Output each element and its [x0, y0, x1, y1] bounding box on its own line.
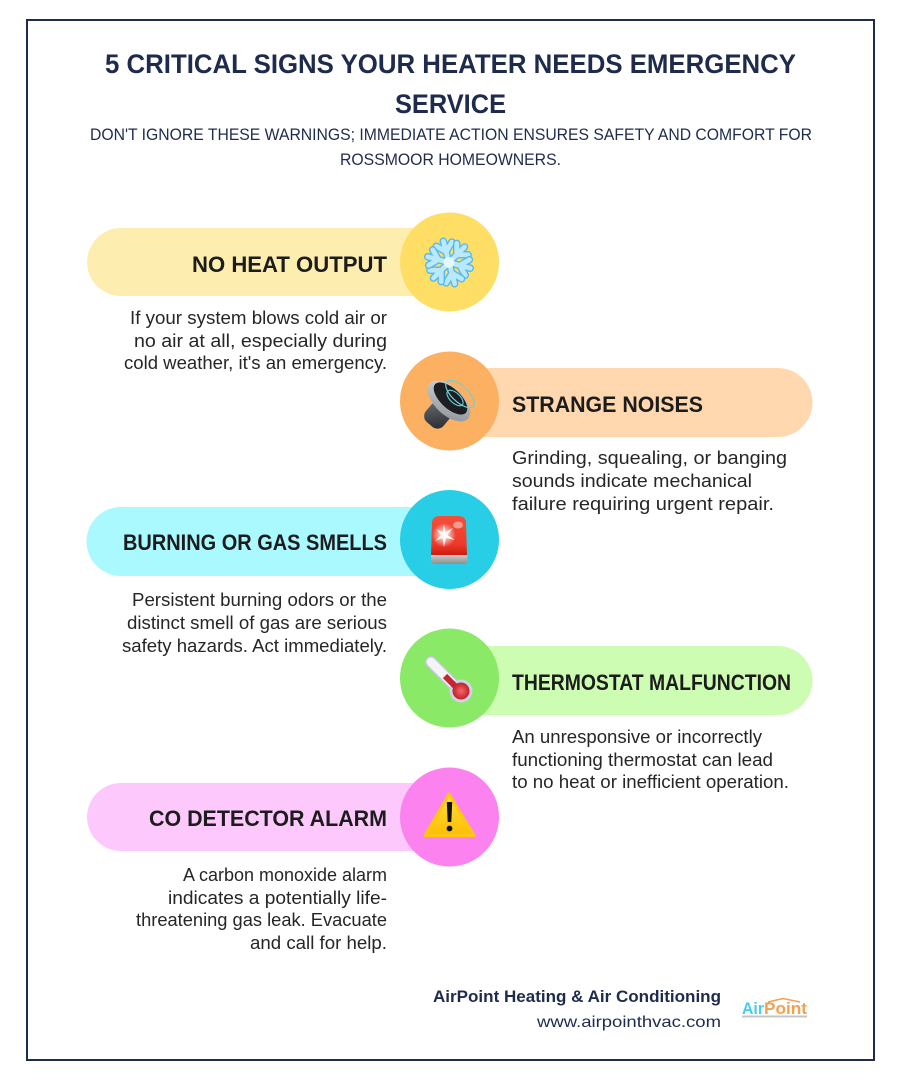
logo: AirPoint: Point: [764, 999, 807, 1018]
logo: AirPoint: Air: [742, 999, 764, 1018]
pill: co detector alarm: [87, 783, 440, 851]
text: burning or gas smells: [122, 590, 387, 656]
text: thermostat malfunction: An unresponsive or incorrectly: [512, 727, 762, 747]
footer company name: AirPoint Heating & Air Conditioning: [433, 988, 721, 1006]
text: co detector alarm: threatening gas leak. Evacuate: [136, 910, 387, 930]
circle: co detector alarm: [400, 768, 499, 866]
heading: no heat output: NO HEAT OUTPUT: [192, 252, 388, 277]
heading: burning or gas smells: BURNING OR GAS SMELLS: [123, 530, 387, 555]
icon: thermometer: [431, 662, 472, 702]
title: SERVICE: [395, 89, 506, 119]
text: co detector alarm: A carbon monoxide alarm: [183, 865, 387, 885]
text: no heat output: [124, 308, 387, 373]
text: strange noises: failure requiring urgent repair.: [512, 494, 774, 514]
pill: thermostat malfunction: [460, 646, 813, 715]
text: no heat output: If your system blows cold air or: [130, 308, 387, 328]
text: no heat output: cold weather, it's an emergency.: [124, 353, 387, 373]
text: co detector alarm: and call for help.: [250, 933, 387, 953]
panel: strange noises: [400, 352, 813, 514]
heading: co detector alarm: CO DETECTOR ALARM: [149, 806, 387, 831]
text: burning or gas smells: distinct smell of gas are serious: [127, 613, 387, 633]
logo: AirPoint: [742, 998, 807, 1018]
title: [105, 49, 796, 119]
subtitle: [90, 125, 812, 169]
subtitle: ROSSMOOR HOMEOWNERS.: [340, 150, 561, 169]
text: strange noises: Grinding, squealing, or banging: [512, 448, 787, 468]
circle: no heat output: [400, 212, 499, 312]
panel: co detector alarm: [87, 768, 499, 953]
icon: warning triangle: [425, 794, 474, 836]
heading: strange noises: STRANGE NOISES: [512, 392, 703, 417]
text: co detector alarm: indicates a potentially life-: [168, 888, 387, 908]
icon: snowflake: [421, 235, 477, 290]
panel: thermostat malfunction: [400, 628, 813, 792]
text: burning or gas smells: safety hazards. Act immediately.: [122, 636, 387, 656]
circle: burning or gas smells: [400, 490, 499, 589]
panel: no heat output: [87, 212, 499, 373]
pill: burning or gas smells: [87, 507, 440, 576]
title: 5 CRITICAL SIGNS YOUR HEATER NEEDS EMERGENCY: [105, 49, 796, 79]
icon: speaker: [420, 373, 479, 432]
text: thermostat malfunction: to no heat or inefficient operation.: [512, 772, 789, 792]
circle: strange noises: [400, 352, 499, 450]
circle: thermostat malfunction: [400, 628, 499, 728]
pill: no heat output: [87, 228, 440, 296]
text: thermostat malfunction: [512, 727, 789, 792]
footer website: www.airpointhvac.com: [536, 1014, 721, 1031]
icon: siren: [431, 516, 468, 564]
pill: strange noises: [460, 368, 813, 437]
subtitle: DON'T IGNORE THESE WARNINGS; IMMEDIATE ACTION ENSURES SAFETY AND COMFORT FOR: [90, 125, 812, 144]
text: burning or gas smells: Persistent burning odors or the: [132, 590, 387, 610]
text: thermostat malfunction: functioning thermostat can lead: [512, 750, 773, 770]
text: strange noises: sounds indicate mechanical: [512, 471, 752, 491]
text: strange noises: [512, 448, 787, 514]
panel: burning or gas smells: [87, 490, 499, 656]
text: co detector alarm: [136, 865, 387, 953]
heading: thermostat malfunction: THERMOSTAT MALFUNCTION: [512, 670, 791, 695]
text: no heat output: no air at all, especially during: [134, 331, 387, 351]
